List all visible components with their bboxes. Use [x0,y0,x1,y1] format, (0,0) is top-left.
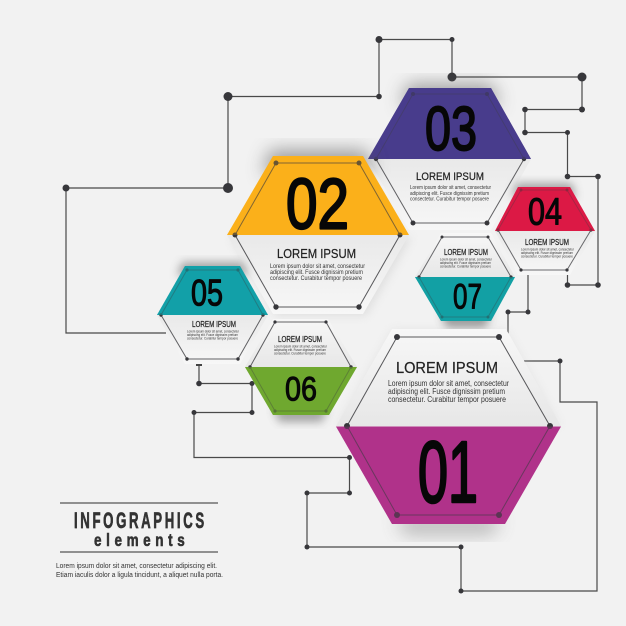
number 02: 02 [286,166,349,244]
text 03: Lorem ipsum dolor sit amet, consectetur [410,185,491,191]
text 06 [274,335,328,355]
text 05 [187,320,240,340]
text 02 [270,247,366,282]
number 06: 06 [285,370,317,408]
text 02: Lorem ipsum dolor sit amet, consectetur [270,263,366,270]
title block [56,503,223,579]
hexagon 02 [227,150,412,316]
hexagon 06 [245,319,357,422]
text 04: LOREM IPSUM [525,238,569,247]
text 06: Lorem ipsum dolor sit amet, consectetur [274,344,328,348]
text 01: LOREM IPSUM [396,360,498,377]
connector lines [62,36,601,594]
text 03 [410,171,491,202]
text 02: consectetur. Curabitur tempor posuere [270,275,362,282]
text 06: adipiscing elit. Fusce dignissim pretium [274,348,326,352]
description: Lorem ipsum dolor sit amet, consectetur adipiscing elit. [56,563,217,570]
number 04: 04 [528,192,562,234]
text 01: adipiscing elit. Fusce dignissim pretium [388,387,505,396]
text 05: adipiscing elit. Fusce dignissim pretium [187,333,238,337]
number 01: 01 [418,424,478,521]
text 04 [521,238,575,258]
text 03: consectetur. Curabitur tempor posuere [410,196,489,202]
text 05: consectetur. Curabitur tempor posuere [187,336,238,340]
number 05: 05 [191,272,223,314]
text 05: LOREM IPSUM [192,320,236,329]
text 04: consectetur. Curabitur tempor posuere [521,254,573,258]
text 07: LOREM IPSUM [444,248,488,257]
band 04 [495,187,595,231]
text 04: adipiscing elit. Fusce dignissim pretium [521,251,573,255]
band 05 [157,266,268,315]
hexagon 01 [336,329,561,534]
text 07: consectetur. Curabitur tempor posuere [440,264,491,268]
text 05: Lorem ipsum dolor sit amet, consectetur [187,329,240,333]
title: INFOGRAPHICS [74,509,204,533]
hexagon 04 [495,183,595,275]
text 01: consectetur. Curabitur tempor posuere [388,395,506,404]
text 01: Lorem ipsum dolor sit amet, consectetur [388,379,509,388]
number 03: 03 [425,95,477,164]
text 07: Lorem ipsum dolor sit amet, consectetur [440,257,493,261]
text 01 [388,360,509,404]
subtitle: elements [94,531,185,551]
text 06: LOREM IPSUM [278,335,322,344]
hexagon 05 [157,262,268,364]
text 03: adipiscing elit. Fusce dignissim pretium [410,191,489,197]
band 07 [415,277,515,321]
text 04: Lorem ipsum dolor sit amet, consectetur [521,247,575,251]
hexagon 03 [368,84,531,230]
text 07 [440,248,493,268]
band 02 [227,156,409,235]
number 07: 07 [453,278,482,316]
band 03 [368,88,531,159]
description: Etiam iaculis dolor a ligula tincidunt, a aliquet nulla porta. [56,572,223,579]
band 01 [336,426,561,524]
text 02: adipiscing elit. Fusce dignissim pretium [270,269,363,276]
band 06 [245,367,357,415]
text 06: consectetur. Curabitur tempor posuere [274,351,326,355]
description [56,563,223,579]
hexagon 07 [415,233,515,328]
text 02: LOREM IPSUM [277,247,356,261]
text 03: LOREM IPSUM [416,171,484,183]
text 07: adipiscing elit. Fusce dignissim pretium [440,261,491,265]
